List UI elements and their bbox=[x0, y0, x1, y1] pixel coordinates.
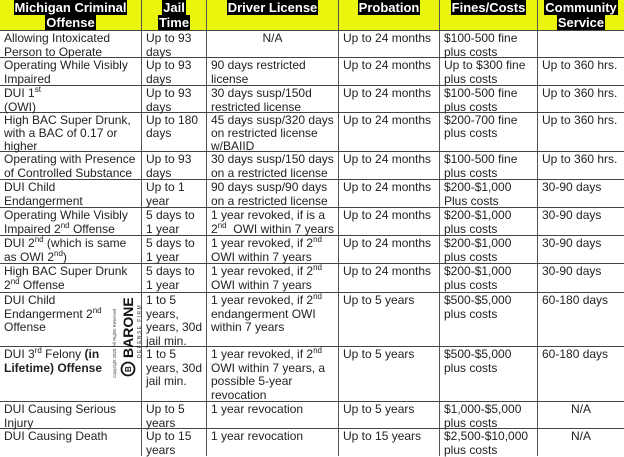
row: visibly impaired 2nd: 1 year revoked, if is a bbox=[211, 208, 325, 222]
row: DUI 3rd felony: Lifetime) Offense bbox=[4, 360, 102, 374]
row: high BAC: plus costs bbox=[444, 126, 497, 140]
row: serious injury: $1,000-$5,000 bbox=[444, 402, 521, 416]
row: child endangerment bbox=[0, 180, 624, 208]
row: child endangerment 2nd: 1 year revoked, if 2nd bbox=[211, 292, 322, 307]
row: high BAC 2nd: Up to 24 months bbox=[343, 264, 431, 278]
row: DUI 3rd felony bbox=[0, 347, 624, 402]
row: visibly impaired: Operating While Visibly bbox=[4, 58, 128, 72]
row: high BAC: higher bbox=[4, 139, 37, 153]
row: DUI 3rd felony: jail min. bbox=[146, 374, 187, 388]
row: high BAC 2nd: plus costs bbox=[444, 278, 497, 292]
row: DUI 3rd felony: years, 30d bbox=[146, 360, 202, 374]
header row: Driver License bbox=[228, 0, 317, 15]
row: DUI 3rd felony: possible 5-year bbox=[211, 374, 292, 388]
row: serious injury: Injury bbox=[4, 416, 33, 430]
row: visibly impaired 2nd bbox=[0, 208, 624, 236]
row: child endangerment 2nd bbox=[0, 293, 624, 347]
row: child endangerment 2nd: within 7 years bbox=[211, 320, 284, 334]
row: high BAC 2nd: 30-90 days bbox=[542, 264, 601, 278]
row: high BAC bbox=[0, 113, 624, 152]
header row bbox=[0, 0, 624, 31]
row: DUI 2nd: $200-$1,000 bbox=[444, 236, 511, 250]
header row: Community bbox=[545, 0, 617, 15]
row: child endangerment: on a restricted license bbox=[211, 194, 328, 208]
row: serious injury: 1 year revocation bbox=[211, 402, 303, 416]
header row: Michigan Criminal bbox=[15, 0, 126, 15]
row: DUI 2nd: as OWI 2nd) bbox=[4, 248, 67, 264]
row: visibly impaired: Impaired bbox=[4, 72, 51, 86]
row: visibly impaired 2nd: 5 days to bbox=[146, 208, 195, 222]
row: DUI 1st: $100-500 fine bbox=[444, 86, 517, 100]
row: child endangerment: Plus costs bbox=[444, 194, 499, 208]
row: high BAC 2nd: $200-$1,000 bbox=[444, 264, 511, 278]
row: child endangerment 2nd: $500-$5,000 bbox=[444, 293, 511, 307]
row: controlled substance: Operating with Presence bbox=[4, 152, 135, 166]
row: high BAC: Up to 24 months bbox=[343, 113, 431, 127]
row: death: N/A bbox=[571, 429, 591, 443]
row: child endangerment 2nd: DUI Child bbox=[4, 293, 55, 307]
row: child endangerment 2nd: jail min. bbox=[146, 334, 187, 348]
row: allowing intoxicated: days bbox=[146, 44, 171, 58]
row: allowing intoxicated: Allowing Intoxicated bbox=[4, 31, 110, 45]
row: DUI 3rd felony: revocation bbox=[211, 388, 266, 402]
row: controlled substance: 30 days susp/150 days bbox=[211, 152, 334, 166]
row: visibly impaired: Up to 93 bbox=[146, 58, 191, 72]
row: DUI 3rd felony: plus costs bbox=[444, 360, 497, 374]
row: visibly impaired: days bbox=[146, 72, 171, 86]
row: DUI 2nd: OWI within 7 years bbox=[211, 250, 312, 264]
row: serious injury: plus costs bbox=[444, 416, 497, 430]
row: high BAC 2nd: 5 days to bbox=[146, 264, 195, 278]
row: visibly impaired bbox=[0, 58, 624, 86]
row: DUI 3rd felony: Up to 5 years bbox=[343, 347, 414, 361]
row: controlled substance: Up to 24 months bbox=[343, 152, 431, 166]
row: DUI 1st: Up to 24 months bbox=[343, 86, 431, 100]
row: high BAC: w/BAIID bbox=[211, 139, 254, 153]
row: death: 1 year revocation bbox=[211, 429, 303, 443]
row: high BAC: with a BAC of 0.17 or bbox=[4, 126, 117, 140]
row: visibly impaired 2nd: Up to 24 months bbox=[343, 208, 431, 222]
header row: Offense bbox=[46, 15, 95, 30]
row: high BAC 2nd bbox=[0, 264, 624, 293]
row: serious injury: N/A bbox=[571, 402, 591, 416]
row: DUI 3rd felony: OWI within 7 years, a bbox=[211, 360, 325, 374]
row: visibly impaired 2nd: $200-$1,000 bbox=[444, 208, 511, 222]
row: visibly impaired 2nd: 2nd OWI within 7 years bbox=[211, 220, 334, 236]
row: visibly impaired: plus costs bbox=[444, 72, 497, 86]
row: death bbox=[4, 429, 591, 456]
row: child endangerment: 90 days susp/90 days bbox=[211, 180, 327, 194]
row: serious injury: years bbox=[146, 416, 175, 430]
row: DUI 1st: DUI 1st bbox=[4, 85, 41, 100]
row: child endangerment 2nd: 60-180 days bbox=[542, 293, 608, 307]
row: DUI 3rd felony: 1 to 5 bbox=[146, 347, 176, 361]
row: DUI 1st: restricted license bbox=[211, 100, 301, 114]
watermark: Barone Defense Firm: DEFENSE FIRM bbox=[137, 304, 143, 358]
row: high BAC: 45 days susp/320 days bbox=[211, 113, 334, 127]
row: child endangerment 2nd: Offense bbox=[4, 320, 46, 334]
row: visibly impaired: 90 days restricted bbox=[211, 58, 306, 72]
row: controlled substance: on a restricted license bbox=[211, 166, 328, 180]
row: visibly impaired 2nd: Operating While Visibly bbox=[4, 208, 128, 222]
row: high BAC 2nd: 1 year bbox=[146, 278, 179, 292]
watermark: Barone Defense Firm bbox=[112, 297, 143, 378]
row: DUI 1st: (OWI) bbox=[4, 100, 36, 114]
row: controlled substance: days bbox=[146, 166, 171, 180]
row: DUI 1st: Up to 360 hrs. bbox=[542, 86, 617, 100]
row: child endangerment: Endangerment bbox=[4, 194, 83, 208]
row: child endangerment 2nd: Up to 5 years bbox=[343, 293, 414, 307]
row: child endangerment: DUI Child bbox=[4, 180, 55, 194]
row: controlled substance bbox=[0, 152, 624, 180]
row: death: years bbox=[146, 442, 175, 456]
row: serious injury bbox=[0, 402, 624, 429]
row: death: plus costs bbox=[444, 442, 497, 456]
row: child endangerment: Up to 24 months bbox=[343, 180, 431, 194]
row: child endangerment 2nd: years, bbox=[146, 306, 179, 320]
row: DUI 1st bbox=[0, 86, 624, 113]
row: child endangerment: year bbox=[146, 194, 169, 208]
header row: Fines/Costs bbox=[452, 0, 525, 15]
row: DUI 2nd: 30-90 days bbox=[542, 236, 601, 250]
row: DUI 1st: 30 days susp/150d bbox=[211, 86, 312, 100]
header row: Probation bbox=[359, 0, 419, 15]
row: DUI 2nd: 1 year revoked, if 2nd bbox=[211, 235, 322, 250]
row: serious injury: Up to 5 years bbox=[343, 402, 414, 416]
row: allowing intoxicated: Up to 93 bbox=[146, 31, 191, 45]
row: controlled substance: plus costs bbox=[444, 166, 497, 180]
row: DUI 1st: days bbox=[146, 100, 171, 114]
watermark: Barone Defense Firm: BARONE bbox=[120, 297, 136, 358]
header row: Time bbox=[159, 15, 189, 30]
row: high BAC: High BAC Super Drunk, bbox=[4, 113, 131, 127]
row: allowing intoxicated: Up to 24 months bbox=[343, 31, 431, 45]
row: child endangerment 2nd: 1 to 5 bbox=[146, 293, 176, 307]
row: death: Up to 15 bbox=[146, 429, 191, 443]
row: death: $2,500-$10,000 bbox=[444, 429, 528, 443]
row: DUI 1st: Up to 93 bbox=[146, 86, 191, 100]
row: death: Up to 15 years bbox=[343, 429, 421, 443]
row: allowing intoxicated: $100-500 fine bbox=[444, 31, 517, 45]
row: DUI 2nd: Up to 24 months bbox=[343, 236, 431, 250]
row: visibly impaired 2nd: 30-90 days bbox=[542, 208, 601, 222]
row: serious injury: DUI Causing Serious bbox=[4, 402, 116, 416]
row: child endangerment 2nd: Endangerment 2nd bbox=[4, 306, 102, 320]
row: high BAC: Up to 360 hrs. bbox=[542, 113, 617, 127]
row: DUI 1st: plus costs bbox=[444, 100, 497, 114]
row: DUI 2nd: plus costs bbox=[444, 250, 497, 264]
row: DUI 3rd felony: 60-180 days bbox=[542, 347, 608, 361]
row: DUI 3rd felony: DUI 3rd Felony (in bbox=[4, 346, 99, 361]
row: high BAC: $200-700 fine bbox=[444, 113, 517, 127]
row: child endangerment: 30-90 days bbox=[542, 180, 601, 194]
watermark: Barone Defense Firm: Copyright 2020. All Rights Reserved bbox=[112, 308, 117, 378]
row: high BAC 2nd: High BAC Super Drunk bbox=[4, 264, 127, 278]
header row: Jail bbox=[163, 0, 185, 15]
row: high BAC: Up to 180 bbox=[146, 113, 198, 127]
row: death: DUI Causing Death bbox=[4, 429, 107, 443]
row: visibly impaired: Up to $300 fine bbox=[444, 58, 525, 72]
row: DUI 3rd felony: 1 year revoked, if 2nd bbox=[211, 346, 322, 361]
row: high BAC: days bbox=[146, 126, 171, 140]
row: controlled substance: Up to 360 hrs. bbox=[542, 152, 617, 166]
row: child endangerment 2nd: years, 30d bbox=[146, 320, 202, 334]
row: DUI 2nd: 1 year bbox=[146, 250, 179, 264]
row: DUI 2nd bbox=[0, 236, 624, 264]
row: visibly impaired 2nd: Impaired 2nd Offense bbox=[4, 220, 115, 236]
row: high BAC: on restricted license bbox=[211, 126, 318, 140]
row: serious injury: Up to 5 bbox=[146, 402, 185, 416]
row: visibly impaired: Up to 360 hrs. bbox=[542, 58, 617, 72]
row: visibly impaired 2nd: 1 year bbox=[146, 222, 179, 236]
row: DUI 2nd: 5 days to bbox=[146, 236, 195, 250]
row: visibly impaired: license bbox=[211, 72, 248, 86]
row: allowing intoxicated: N/A bbox=[262, 31, 282, 45]
row: child endangerment 2nd: endangerment OWI bbox=[211, 306, 316, 320]
row: allowing intoxicated bbox=[0, 31, 624, 58]
row: visibly impaired 2nd: plus costs bbox=[444, 222, 497, 236]
row: controlled substance: $100-500 fine bbox=[444, 152, 517, 166]
row: controlled substance: of Controlled Substance bbox=[4, 166, 132, 180]
row: allowing intoxicated: Person to Operate bbox=[4, 44, 102, 58]
header row: Service bbox=[558, 15, 604, 30]
row: child endangerment: Up to 1 bbox=[146, 180, 185, 194]
row: child endangerment 2nd: plus costs bbox=[444, 306, 497, 320]
row: child endangerment: $200-$1,000 bbox=[444, 180, 511, 194]
row: allowing intoxicated: plus costs bbox=[444, 44, 497, 58]
row: high BAC 2nd: 1 year revoked, if 2nd bbox=[211, 263, 322, 278]
row: controlled substance: Up to 93 bbox=[146, 152, 191, 166]
row: high BAC 2nd: OWI within 7 years bbox=[211, 278, 312, 292]
row: high BAC 2nd: 2nd Offense bbox=[4, 276, 65, 292]
watermark: Barone Defense Firm: B bbox=[124, 366, 133, 372]
row: DUI 2nd: DUI 2nd (which is same bbox=[4, 235, 126, 250]
row: visibly impaired: Up to 24 months bbox=[343, 58, 431, 72]
row: DUI 3rd felony: $500-$5,000 bbox=[444, 347, 511, 361]
